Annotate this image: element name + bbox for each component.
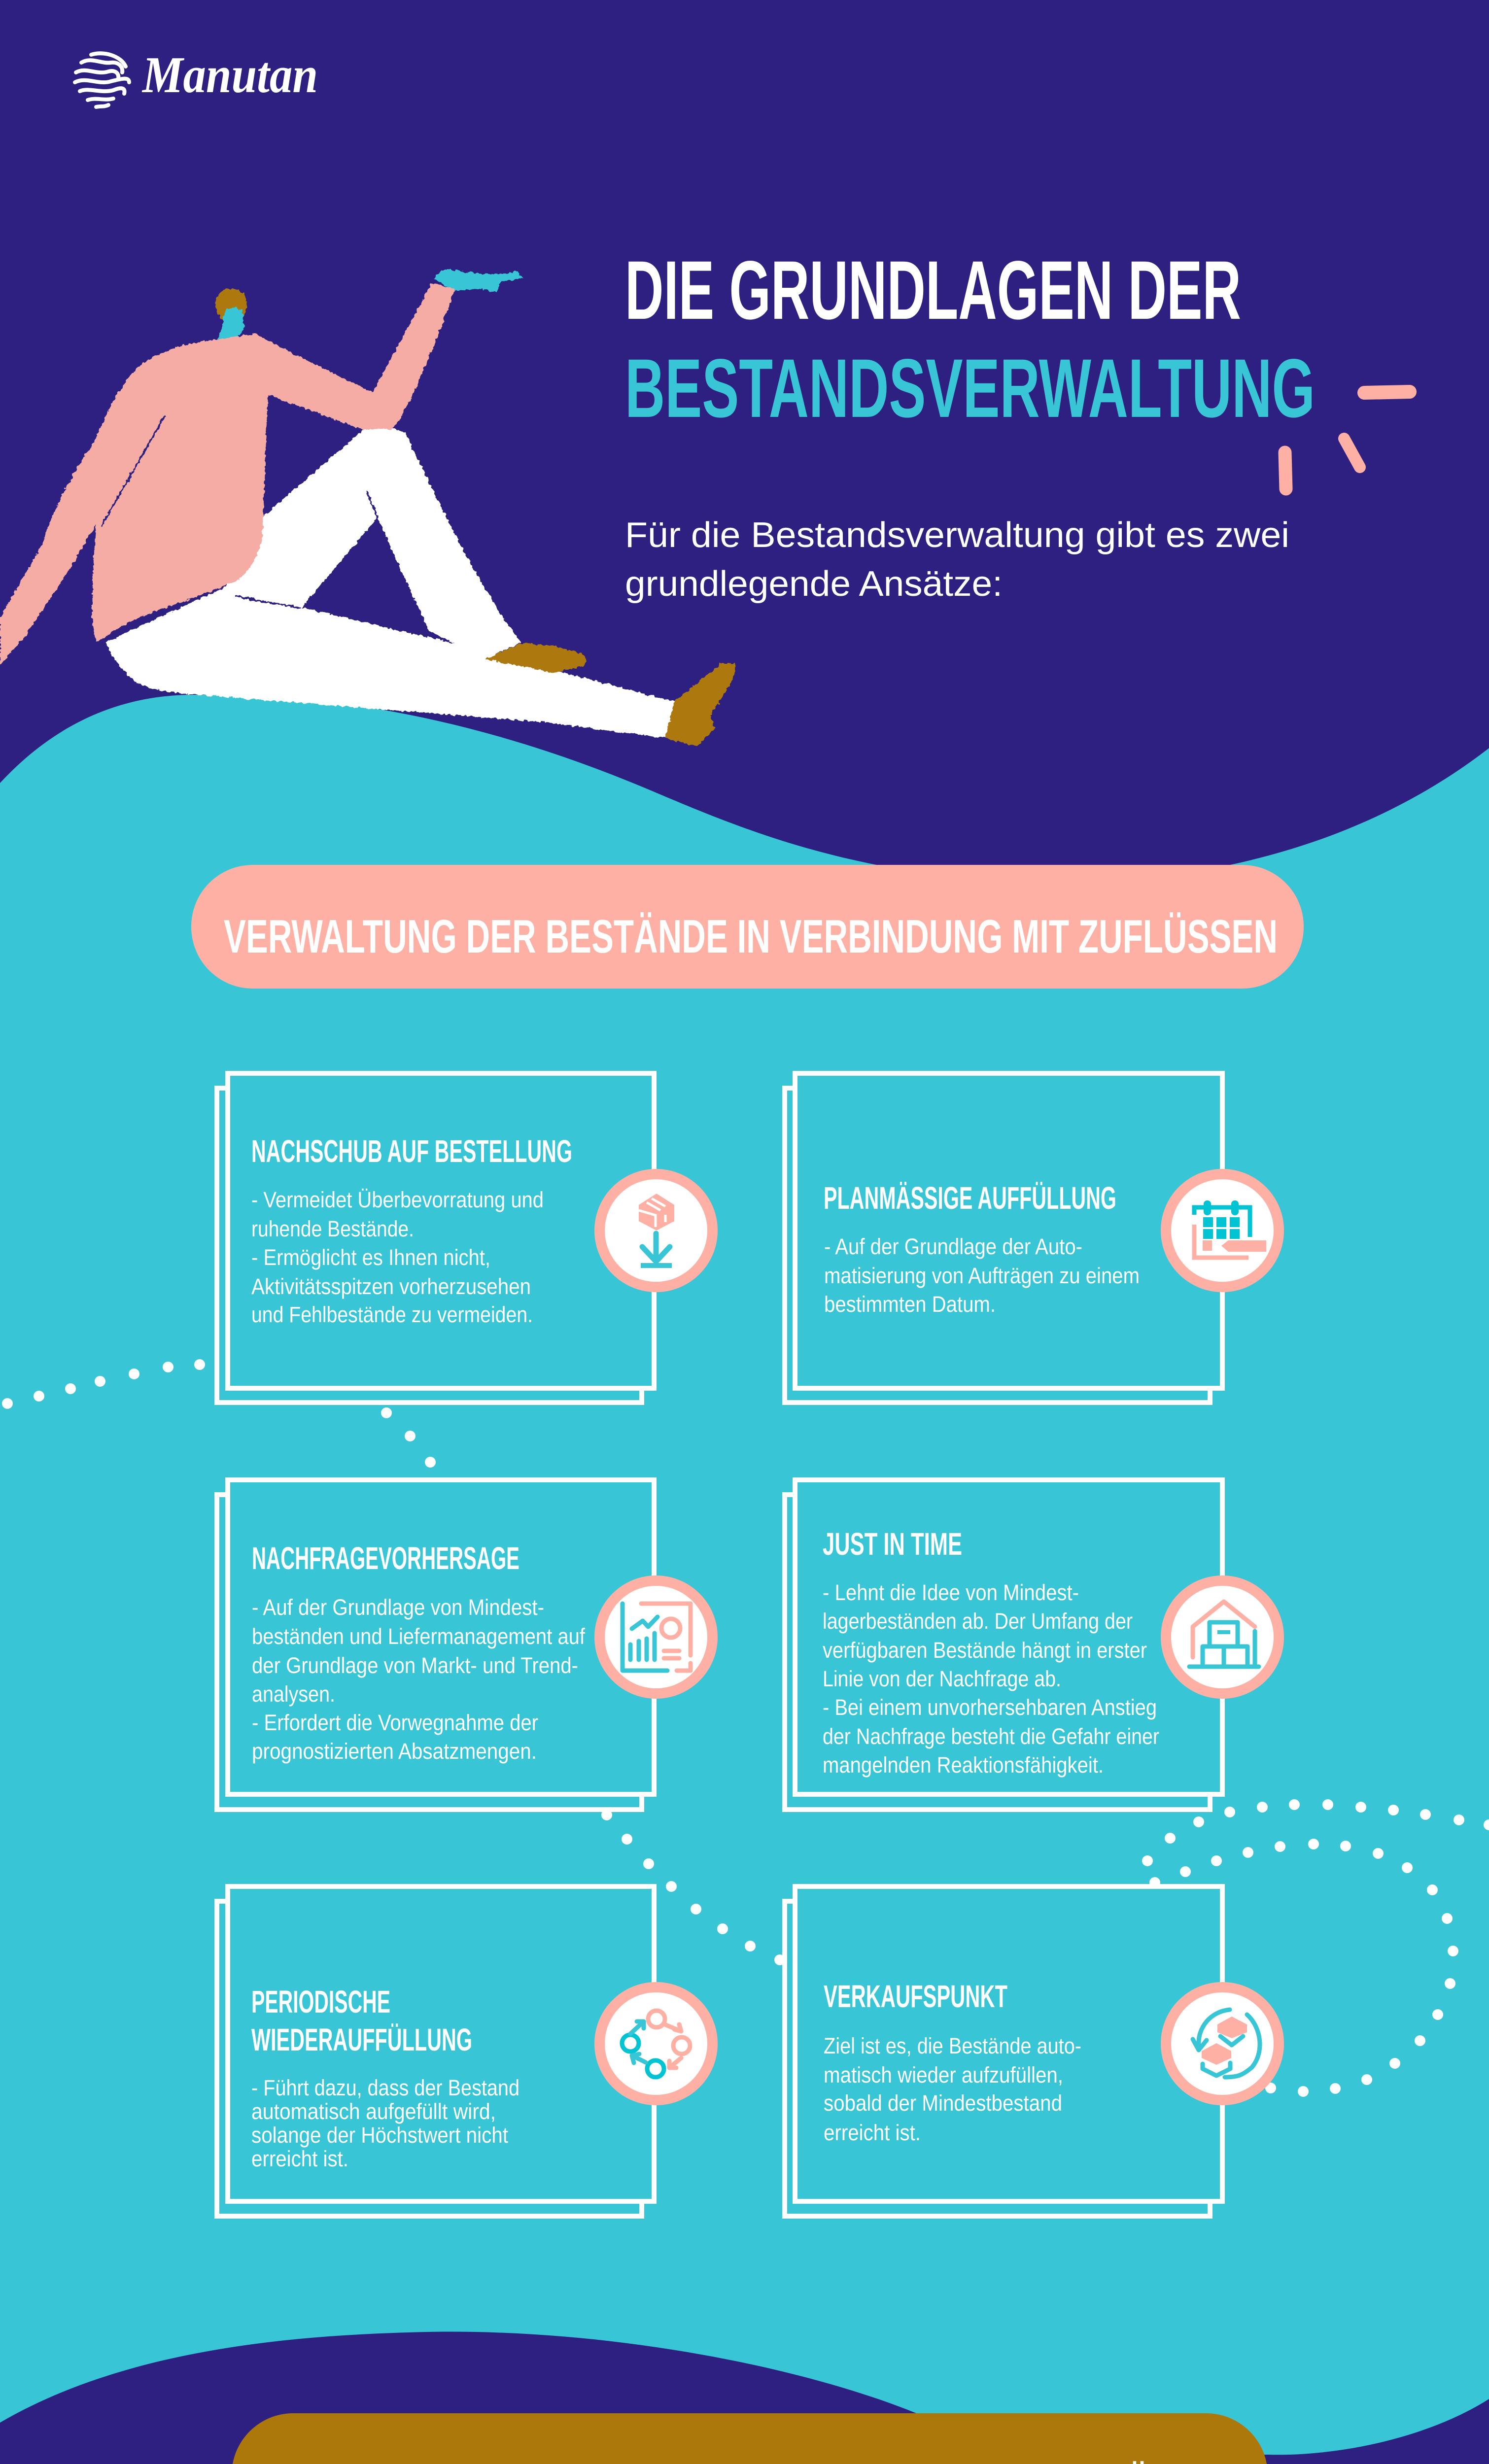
card body: sobald der Mindestbestand — [824, 2090, 1062, 2116]
card heading: PERIODISCHE — [251, 1984, 390, 2019]
card body: - Bei einem unvorhersehbaren Anstieg — [823, 1695, 1157, 1720]
icon: logo swirl — [75, 53, 129, 107]
section 2 pill — [232, 2413, 1268, 2464]
pill background — [232, 2413, 1268, 2464]
card body: ruhende Bestände. — [251, 1216, 414, 1241]
card body: verfügbaren Bestände hängt in erster — [823, 1638, 1147, 1663]
logo: Manutan header — [75, 46, 318, 107]
card body: matisch wieder aufzufüllen, — [824, 2062, 1063, 2088]
panel: Nachfragevorhersage — [217, 1480, 713, 1810]
card frame — [217, 1480, 654, 1810]
man: hair — [215, 288, 247, 322]
card body: bestimmten Datum. — [824, 1292, 996, 1317]
card body: der Nachfrage besteht die Gefahr einer — [823, 1724, 1159, 1749]
card body — [251, 2075, 519, 2171]
card heading — [251, 1984, 472, 2057]
section 1 pill — [191, 865, 1304, 989]
intro line 2: grundlegende Ansätze: — [625, 564, 1003, 604]
man: trousers — [106, 428, 674, 738]
card heading: NACHSCHUB AUF BESTELLUNG — [251, 1133, 572, 1169]
card body: Aktivitätsspitzen vorherzusehen — [251, 1274, 531, 1299]
card body: - Erfordert die Vorwegnahme der — [252, 1710, 538, 1735]
card body — [824, 2033, 1081, 2145]
card body: lagerbeständen ab. Der Umfang der — [823, 1608, 1133, 1634]
card body: Linie von der Nachfrage ab. — [823, 1666, 1061, 1691]
panel: Verkaufspunkt — [785, 1886, 1279, 2216]
card body: automatisch aufgefüllt wird, — [251, 2099, 496, 2124]
man: hand — [434, 270, 523, 293]
icon: box with down arrow — [599, 1174, 713, 1287]
card heading: WIEDERAUFFÜLLUNG — [251, 2022, 472, 2057]
man: sweater — [0, 283, 455, 665]
icon: chart report — [599, 1581, 713, 1693]
card frame — [785, 1073, 1222, 1403]
card body: solange der Höchstwert nicht — [251, 2122, 508, 2148]
card body: - Ermöglicht es Ihnen nicht, — [251, 1245, 490, 1270]
card heading: NACHFRAGEVORHERSAGE — [252, 1540, 519, 1576]
card body: analysen. — [252, 1681, 335, 1707]
card heading: JUST IN TIME — [823, 1526, 962, 1562]
intro text — [625, 515, 1289, 604]
card body: beständen und Liefermanagement auf — [252, 1624, 585, 1649]
card frame — [785, 1886, 1222, 2216]
card body: - Vermeidet Überbevorratung und — [251, 1187, 544, 1212]
background: teal wave band — [0, 695, 1489, 2455]
icon: reorder point cycle — [1166, 1987, 1279, 2100]
pill background — [191, 865, 1304, 989]
card body: - Auf der Grundlage der Auto- — [824, 1234, 1082, 1259]
man: upper shoe — [486, 644, 586, 673]
icon: calendar — [1166, 1174, 1279, 1287]
panel: Nachschub auf Bestellung — [217, 1073, 713, 1403]
card frame — [785, 1480, 1222, 1810]
man: fold lines — [102, 415, 378, 608]
card heading: PLANMÄSSIGE AUFFÜLLUNG — [824, 1180, 1116, 1216]
card frame — [217, 1886, 654, 2216]
card body: Ziel ist es, die Bestände auto- — [824, 2033, 1081, 2058]
card body: erreicht ist. — [824, 2120, 921, 2145]
panel: Periodische Wiederauffüllung — [217, 1886, 713, 2216]
icon: accent dashes — [1285, 392, 1410, 489]
card body: matisierung von Aufträgen zu einem — [824, 1263, 1140, 1288]
card body: - Auf der Grundlage von Mindest- — [252, 1595, 544, 1620]
card body: der Grundlage von Markt- und Trend- — [252, 1653, 578, 1678]
card body: prognostizierten Absatzmengen. — [252, 1739, 537, 1764]
card body: und Fehlbestände zu vermeiden. — [251, 1302, 533, 1327]
card body: erreicht ist. — [251, 2146, 348, 2171]
logo wordmark: Manutan — [141, 46, 318, 103]
dotted line: right loop — [1147, 1805, 1489, 2091]
card body: - Führt dazu, dass der Bestand — [251, 2075, 519, 2100]
card body — [252, 1595, 585, 1764]
card body: - Lehnt die Idee von Mindest- — [823, 1580, 1079, 1605]
card heading: VERKAUFSPUNKT — [824, 1979, 1007, 2014]
illustration: seated man — [0, 270, 736, 747]
icon: warehouse — [1166, 1581, 1279, 1693]
panel: Planmässige Auffüllung — [785, 1073, 1279, 1403]
icon: replenishment cycle — [599, 1987, 713, 2100]
panel: Just in Time — [785, 1480, 1279, 1810]
man: face and neck — [211, 308, 244, 345]
dotted line: left to middle — [7, 1365, 780, 1960]
man: lower shoe — [665, 663, 736, 747]
intro line 1: Für die Bestandsverwaltung gibt es zwei — [625, 515, 1289, 555]
card body: mangelnden Reaktionsfähigkeit. — [823, 1752, 1104, 1778]
card body — [824, 1234, 1140, 1317]
card frame — [217, 1073, 654, 1403]
card body — [251, 1187, 544, 1327]
title — [625, 243, 1315, 435]
card body — [823, 1580, 1159, 1778]
